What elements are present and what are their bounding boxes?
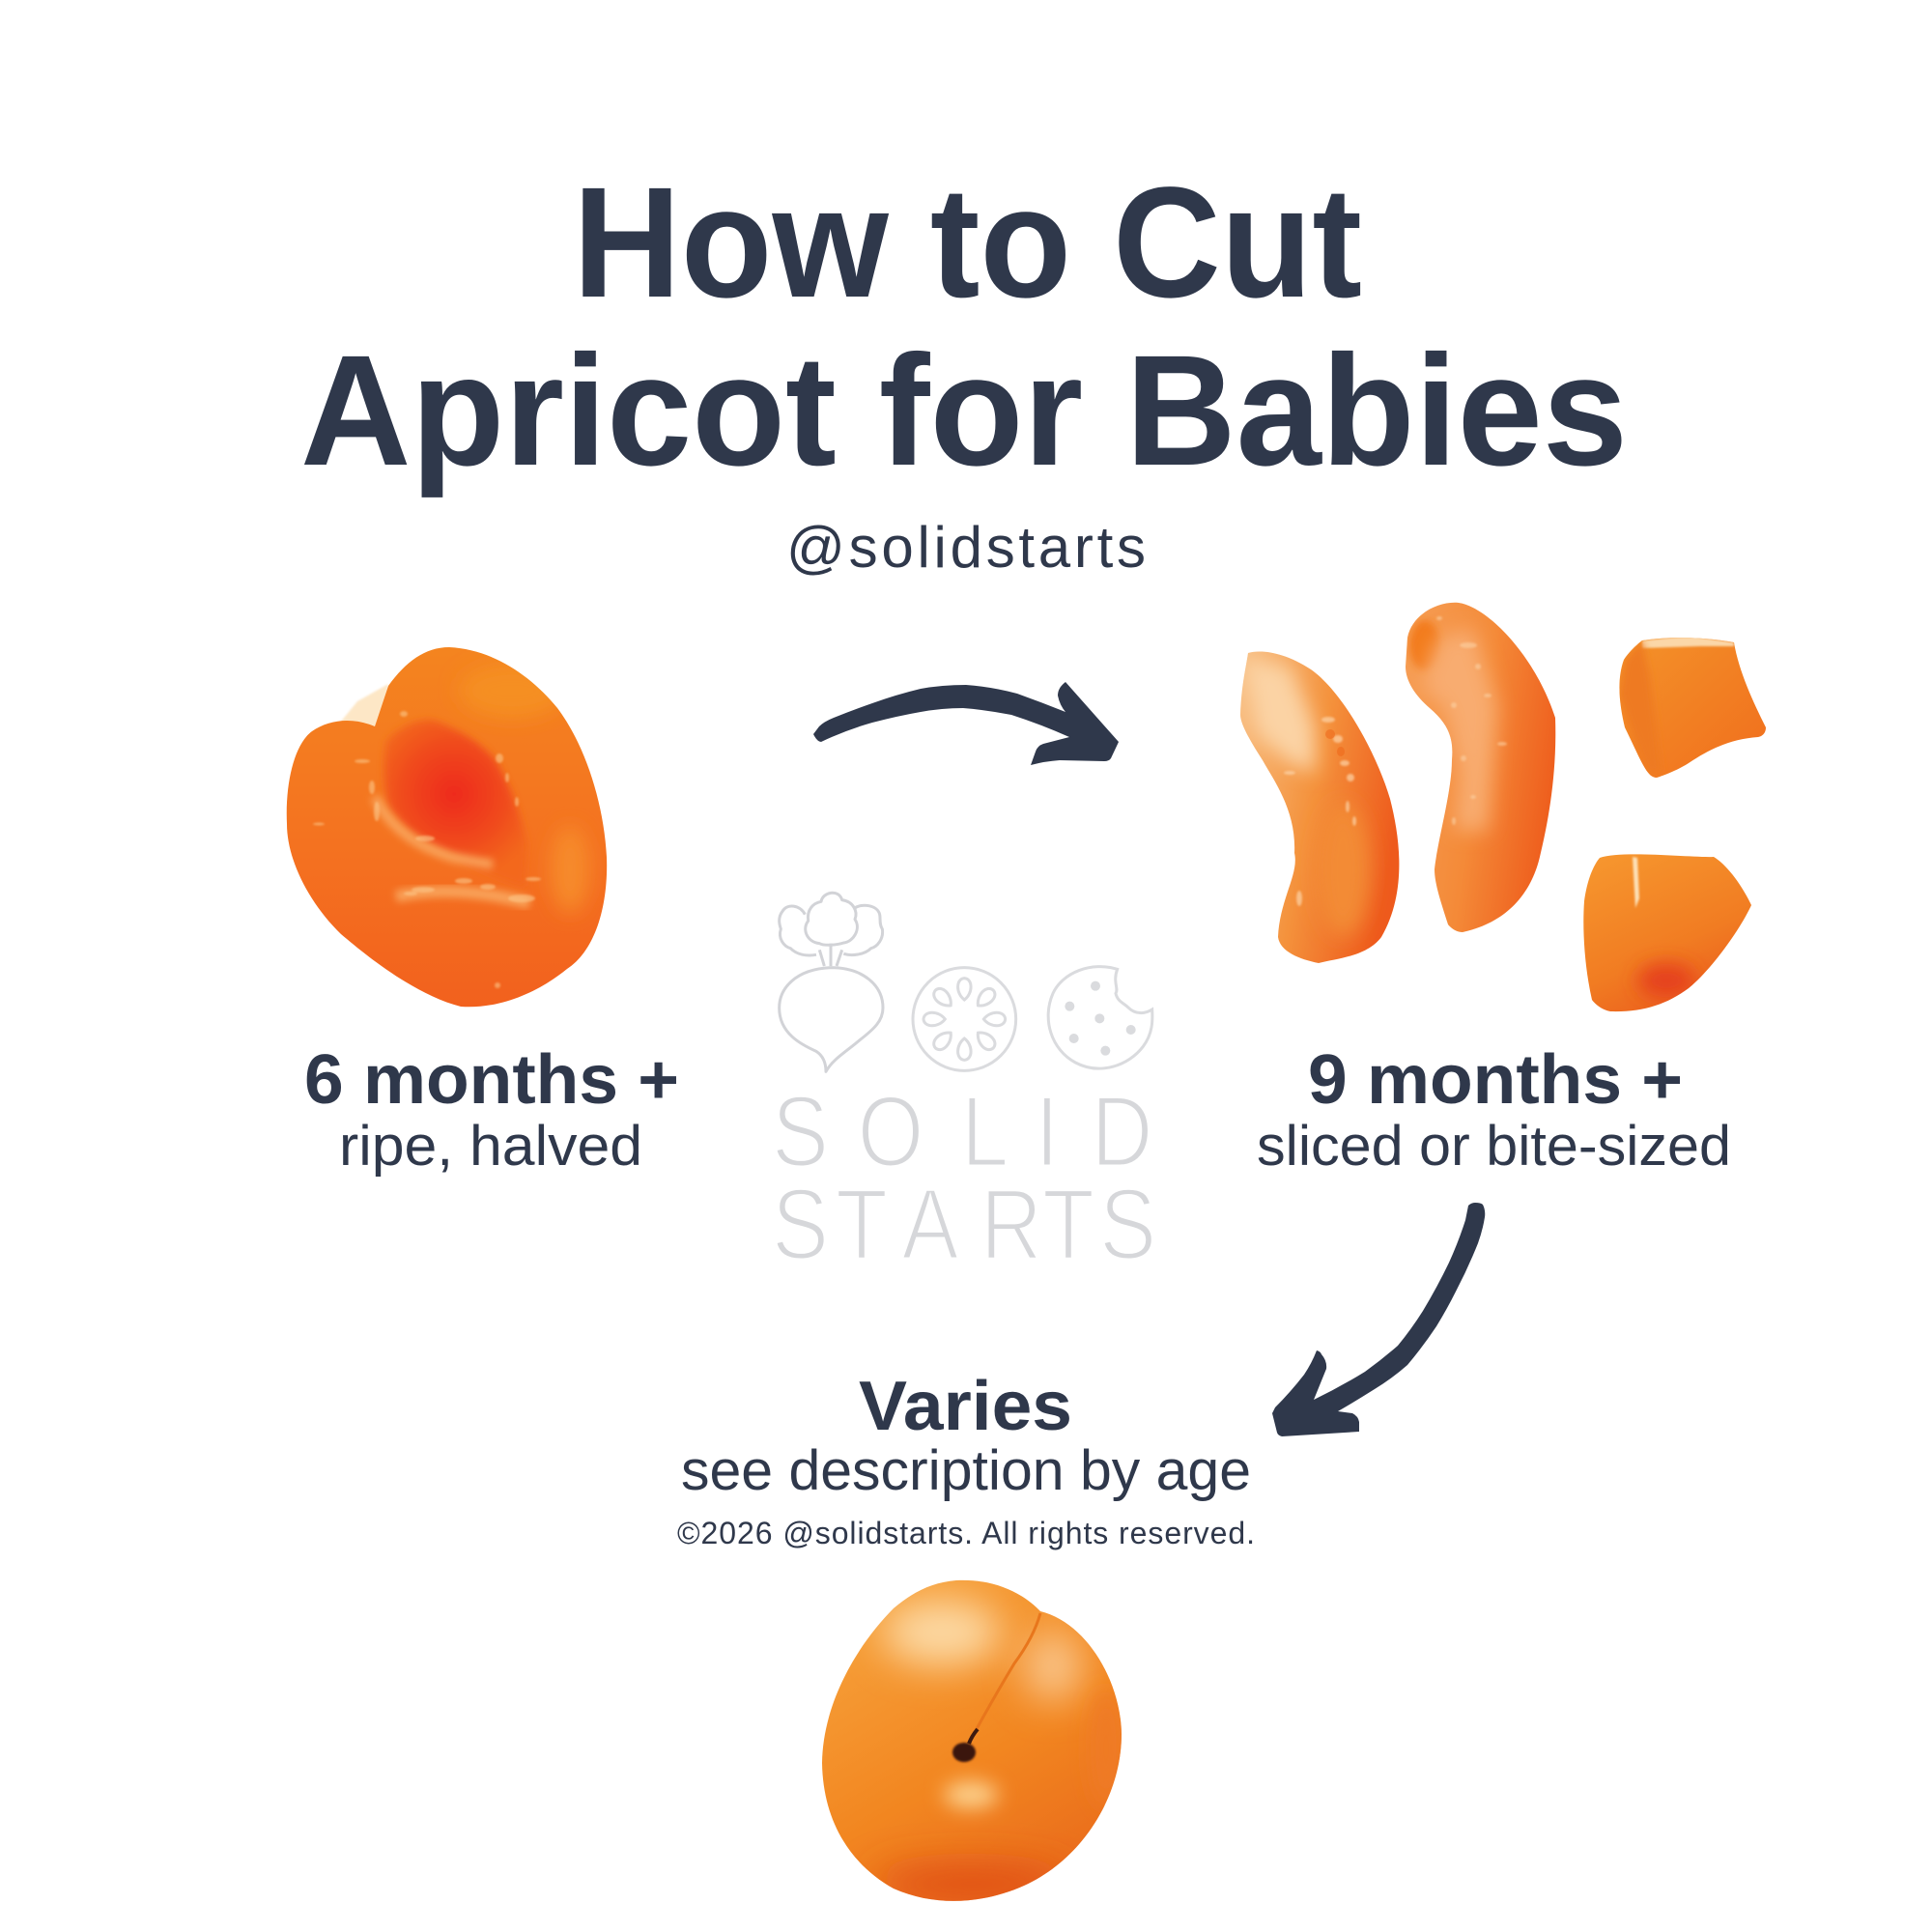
copyright: ©2026 @solidstarts. All rights reserved. — [677, 1516, 1255, 1550]
arrow: to 9 months — [813, 682, 1119, 765]
icon: beet — [780, 893, 883, 1071]
slice one — [1240, 651, 1399, 963]
photo: slices and bite-sized pieces — [1232, 594, 1773, 1014]
title — [300, 154, 1628, 498]
label: varies — [681, 1368, 1251, 1502]
icon: cookie — [1048, 967, 1152, 1068]
label: varies: see description by age — [681, 1439, 1251, 1502]
slice two — [1406, 603, 1555, 932]
label: 9 months: sliced or bite-sized — [1257, 1115, 1731, 1178]
logo wordmark: STARTS — [772, 1169, 1156, 1281]
title: Apricot for Babies — [300, 322, 1628, 498]
logo wordmark: SOLID — [772, 1076, 1152, 1188]
handle: @solidstarts — [786, 515, 1146, 580]
label: 6 months — [304, 1041, 679, 1178]
label: varies: Varies — [859, 1368, 1072, 1445]
icon: tomato slice — [913, 968, 1016, 1070]
arrow: to whole apricot — [1272, 1203, 1485, 1436]
label: 6 months: 6 months + — [304, 1041, 679, 1119]
logo watermark — [772, 893, 1156, 1281]
title: How to Cut — [573, 154, 1362, 330]
infographic canvas — [286, 186, 1766, 1901]
piece one — [1619, 638, 1766, 778]
label: 9 months — [1257, 1041, 1731, 1178]
photo: halved apricot — [286, 647, 607, 1007]
piece two — [1579, 850, 1758, 1014]
label: 9 months: 9 months + — [1308, 1041, 1683, 1119]
label: 6 months: ripe, halved — [339, 1115, 642, 1178]
logo wordmark — [772, 1076, 1156, 1281]
photo: whole apricot — [822, 1580, 1122, 1901]
